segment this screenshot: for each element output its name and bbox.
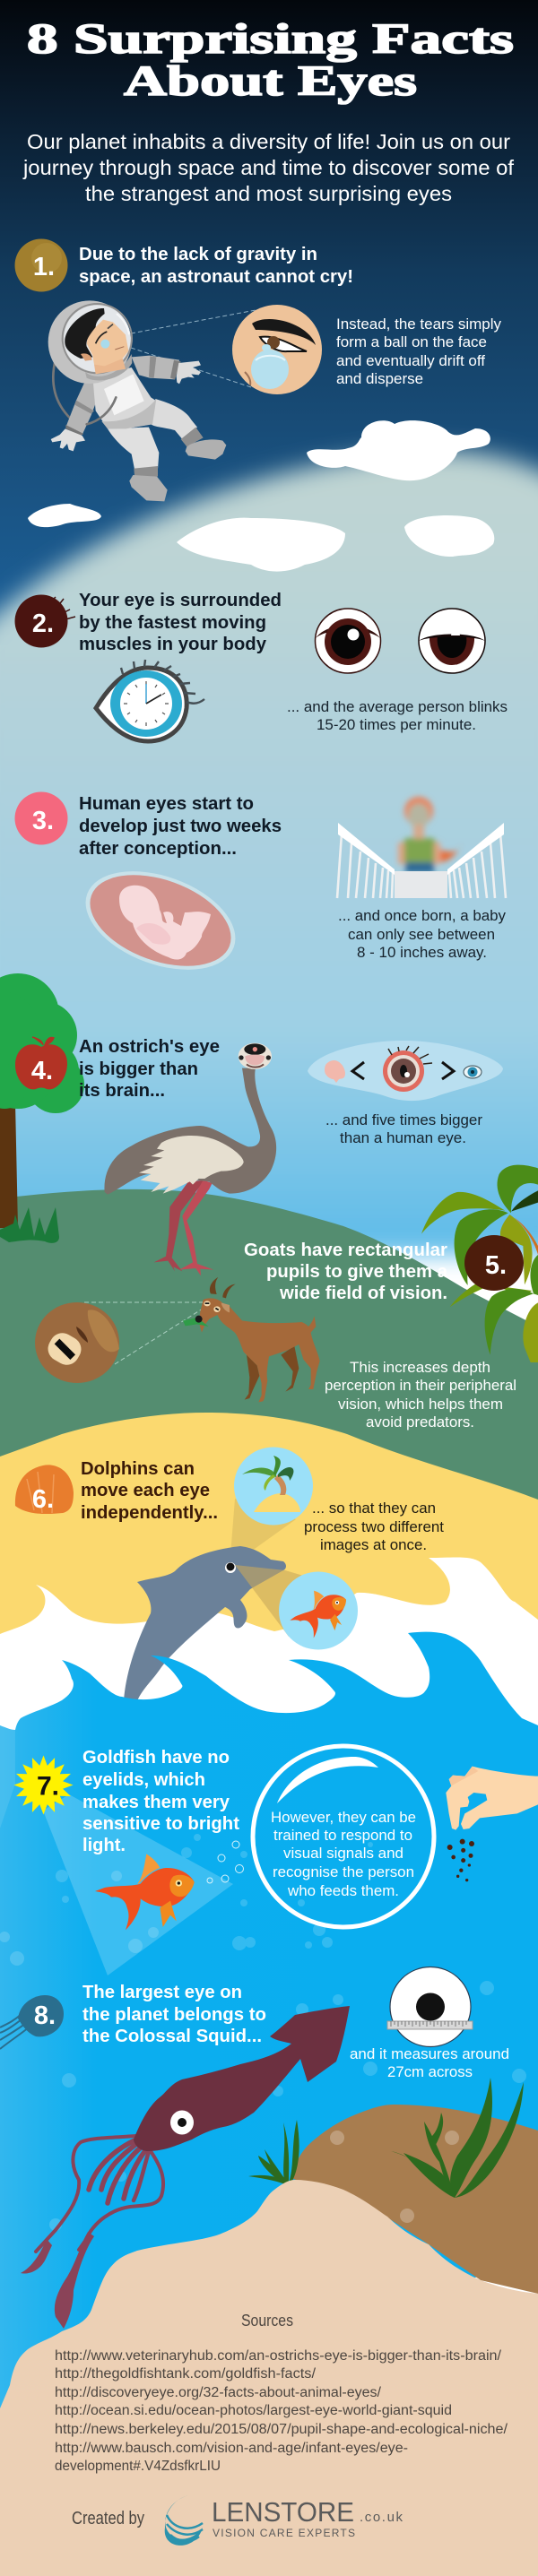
fact 5 badge: 5.: [485, 1251, 507, 1280]
fact 6 heading: move each eye: [81, 1480, 210, 1500]
fact 1 side text: Instead, the tears simply: [336, 316, 501, 333]
fact 3 badge: 3.: [32, 807, 54, 835]
crib: [337, 823, 506, 898]
fact 7 heading: Goldfish have no: [82, 1747, 230, 1768]
fact 7 side text: trained to respond to: [273, 1827, 412, 1844]
ostrich: [104, 1043, 276, 1275]
fact 5 side text: perception in their peripheral: [325, 1377, 516, 1394]
sources list: http://www.bausch.com/vision-and-age/infant-eyes/eye-: [55, 2441, 408, 2456]
fact 7 side text: visual signals and: [283, 1845, 404, 1862]
fact 3 side text: can only see between: [348, 926, 495, 943]
legs and boots: [151, 399, 197, 439]
title: 8 Surprising Facts: [27, 15, 514, 63]
fact 6 heading: Dolphins can: [81, 1458, 195, 1479]
astronaut face: [94, 359, 126, 374]
fact 4 heading: its brain...: [79, 1080, 165, 1101]
earth atmosphere and sky: [0, 451, 538, 1255]
fact 7 heading: eyelids, which: [82, 1769, 205, 1790]
fact 3 heading: Human eyes start to: [79, 793, 254, 814]
fact 2 heading: muscles in your body: [79, 634, 267, 654]
womb with fetus: [72, 852, 249, 989]
fact 2 badge: eyelash circle: 2.: [32, 609, 54, 638]
helmet: [48, 300, 131, 384]
vision cone down: [235, 1565, 325, 1637]
vision cone up: [230, 1499, 296, 1567]
seabed light sand: [0, 2180, 538, 2576]
half closed eye: [419, 609, 485, 673]
fact 3 heading: [79, 793, 282, 859]
intro text: journey through space and time to discover some of: [22, 156, 515, 179]
clouds: [28, 420, 494, 572]
sources list: development#.V4ZdsfkrLIU: [55, 2459, 221, 2474]
fact 1 side text: [336, 316, 501, 387]
fact 8 heading: The largest eye on: [82, 1982, 242, 2002]
tentacles: [36, 2136, 163, 2252]
sand beach: [0, 1413, 538, 1703]
space background: [0, 0, 538, 645]
lighter water at left edge: [0, 1725, 15, 1828]
tentacle blades: [21, 2239, 52, 2274]
fact 7 side text: who feeds them.: [287, 1882, 399, 1899]
fact 7 side text: However, they can be: [271, 1809, 416, 1826]
fact 6 side text: images at once.: [320, 1536, 427, 1553]
lenstore logo: .co.uk: [360, 2510, 404, 2525]
intro text: Our planet inhabits a diversity of life! Join us on our: [27, 130, 510, 153]
fact 1 side text: and eventually drift off: [336, 352, 485, 369]
fact 1 badge: planet: [14, 238, 68, 292]
goldfish thought bubble: [279, 1572, 358, 1649]
wing: [139, 1136, 244, 1194]
fact 3 side text: ... and once born, a baby: [338, 907, 506, 924]
collar: [85, 354, 132, 380]
fact 6 side text: [304, 1500, 444, 1553]
human eye: [464, 1066, 482, 1078]
fact 4 heading: An ostrich's eye: [79, 1036, 220, 1057]
fact 5 heading: wide field of vision.: [279, 1283, 447, 1303]
fact 4 badge: apple: [15, 1037, 67, 1089]
goat eye close-up: [35, 1302, 119, 1383]
fact 7 heading: makes them very: [82, 1792, 230, 1812]
intro text: [22, 130, 515, 205]
fact 7 badge: sun star: 7.: [37, 1771, 59, 1802]
left arm and glove: [65, 381, 100, 435]
fact 1 heading: space, an astronaut cannot cry!: [79, 266, 353, 287]
tree: [0, 973, 84, 1228]
legs: [154, 1180, 204, 1271]
goat eye callout lines: [84, 1302, 206, 1364]
torso: [92, 367, 155, 428]
fact 7 heading: [82, 1747, 239, 1855]
fact 2 heading: [79, 590, 282, 654]
water bubbles: [0, 1834, 526, 2231]
body and neck: [104, 1068, 276, 1195]
fact 7 side text: recognise the person: [273, 1863, 414, 1880]
eye close-up with tear ball: [232, 305, 322, 394]
fact 6 side text: process two different: [304, 1518, 444, 1535]
zoom callout lines: [131, 310, 256, 387]
fact 8 heading: the planet belongs to: [82, 2004, 266, 2025]
fact 3 side text: 8 - 10 inches away.: [357, 944, 487, 961]
sources list: [55, 2348, 508, 2474]
sources list: http://ocean.si.edu/ocean-photos/largest-eye-world-giant-squid: [55, 2403, 452, 2418]
fact 6 heading: [81, 1458, 218, 1523]
fact 5 heading: Goats have rectangular: [244, 1240, 447, 1260]
fact 4 side text: ... and five times bigger: [325, 1111, 482, 1128]
fact 5 side text: vision, which helps them: [338, 1396, 503, 1413]
fact 7 badge: sun star: [14, 1755, 74, 1814]
goat: [183, 1277, 320, 1402]
fact 5 side text: This increases depth: [350, 1359, 490, 1376]
light beam on goldfish: [43, 1794, 233, 1975]
sources list: http://news.berkeley.edu/2015/08/07/pupil-shape-and-ecological-niche/: [55, 2422, 508, 2437]
fact 2 side text: [287, 698, 508, 733]
astronaut illustration: [48, 300, 226, 501]
sources list: http://discoveryeye.org/32-facts-about-animal-eyes/: [55, 2385, 382, 2400]
logo mark: [165, 2495, 203, 2546]
sources list: http://www.veterinaryhub.com/an-ostrichs-eye-is-bigger-than-its-brain/: [55, 2348, 502, 2364]
fact 2 side text: 15-20 times per minute.: [317, 716, 476, 733]
colossal squid: [21, 2006, 350, 2329]
fact 4 side text: than a human eye.: [340, 1129, 466, 1146]
small outlined air bubbles: [207, 1841, 244, 1883]
lenstore logo: LENSTORE: [212, 2496, 354, 2528]
clock eye icon: [96, 660, 204, 741]
created by: Created by: [72, 2509, 144, 2528]
fact 4 heading: [79, 1036, 220, 1101]
fact 7 heading: light.: [82, 1835, 126, 1855]
fact 2 heading: Your eye is surrounded: [79, 590, 282, 610]
fact 7 heading: sensitive to bright: [82, 1813, 239, 1834]
brain: [325, 1060, 345, 1083]
goldfish: [95, 1854, 195, 1930]
fact 1 side text: form a ball on the face: [336, 333, 487, 350]
fact 4 heading: is bigger than: [79, 1059, 198, 1079]
fact 8 badge: jellyfish: 8.: [34, 2001, 56, 2030]
fact 5 side text: avoid predators.: [366, 1413, 474, 1431]
seaweed: [248, 2078, 524, 2198]
dolphin: [124, 1546, 286, 1701]
fact 2 badge: eyelash circle: [14, 595, 75, 647]
fact 6 badge: shell: [15, 1465, 74, 1514]
right arm and glove: [132, 356, 179, 379]
sources heading: Sources: [241, 2312, 293, 2330]
lenstore logo: VISION CARE EXPERTS: [213, 2527, 355, 2539]
fact 3 badge: [14, 792, 68, 844]
fact 1 heading: [79, 244, 353, 287]
title: About Eyes: [124, 57, 417, 105]
ostrich eye: [383, 1050, 424, 1092]
fact 8 side text: and it measures around: [350, 2045, 509, 2062]
fact 7 side text: [271, 1809, 416, 1899]
sources list: http://thegoldfishtank.com/goldfish-facts/: [55, 2366, 317, 2382]
open eye: [316, 609, 380, 673]
fact 2 side text: ... and the average person blinks: [287, 698, 508, 715]
fact 6 heading: independently...: [81, 1502, 218, 1523]
fact 4 badge: apple: 4.: [31, 1057, 53, 1085]
fact 2 heading: by the fastest moving: [79, 612, 266, 633]
palm leaves: [421, 1165, 538, 1362]
fish food: [447, 1839, 474, 1881]
white wave crest: [0, 1557, 538, 1757]
fact 4 side text: [325, 1111, 482, 1146]
grass: [0, 1207, 59, 1243]
fact 5 heading: pupils to give them a: [266, 1261, 448, 1282]
fact 5 side text: [325, 1359, 516, 1431]
fact 5 badge: [464, 1235, 524, 1291]
fact 3 side text: [338, 907, 506, 961]
fact 1 side text: and disperse: [336, 370, 423, 387]
fact 6 badge: shell: 6.: [32, 1485, 54, 1514]
title: [27, 15, 514, 105]
fact 8 side text: 27cm across: [387, 2063, 473, 2080]
island thought bubble: [234, 1447, 313, 1526]
hills: [0, 1189, 538, 1515]
fact 3 heading: develop just two weeks: [79, 816, 282, 836]
ocean and front wave: [0, 1632, 538, 2420]
intro text: the strangest and most surprising eyes: [85, 182, 452, 205]
eye size comparison bubble: [308, 1041, 503, 1101]
fact 8 badge: jellyfish: [0, 1995, 64, 2049]
seabed bubbles: [330, 2131, 459, 2223]
fact 8 heading: the Colossal Squid...: [82, 2026, 262, 2046]
fact 8 side text: [350, 2045, 509, 2080]
fishbowl circle: [253, 1746, 434, 1927]
lenstore logo: [165, 2495, 404, 2546]
fact 8 heading: [82, 1982, 266, 2046]
giant eye with ruler: [387, 1967, 473, 2047]
hand feeding fish: [446, 1767, 538, 1830]
fact 5 heading: [244, 1240, 448, 1303]
blurred mother seen from crib: [398, 797, 462, 873]
fact 6 side text: ... so that they can: [312, 1500, 436, 1517]
fact 1 heading: Due to the lack of gravity in: [79, 244, 317, 264]
fact 1 badge: planet: 1.: [33, 253, 55, 281]
head: [239, 1043, 272, 1069]
fact 3 heading: after conception...: [79, 838, 237, 859]
squid body: [134, 2006, 350, 2151]
seabed brown mound: [291, 2105, 538, 2294]
